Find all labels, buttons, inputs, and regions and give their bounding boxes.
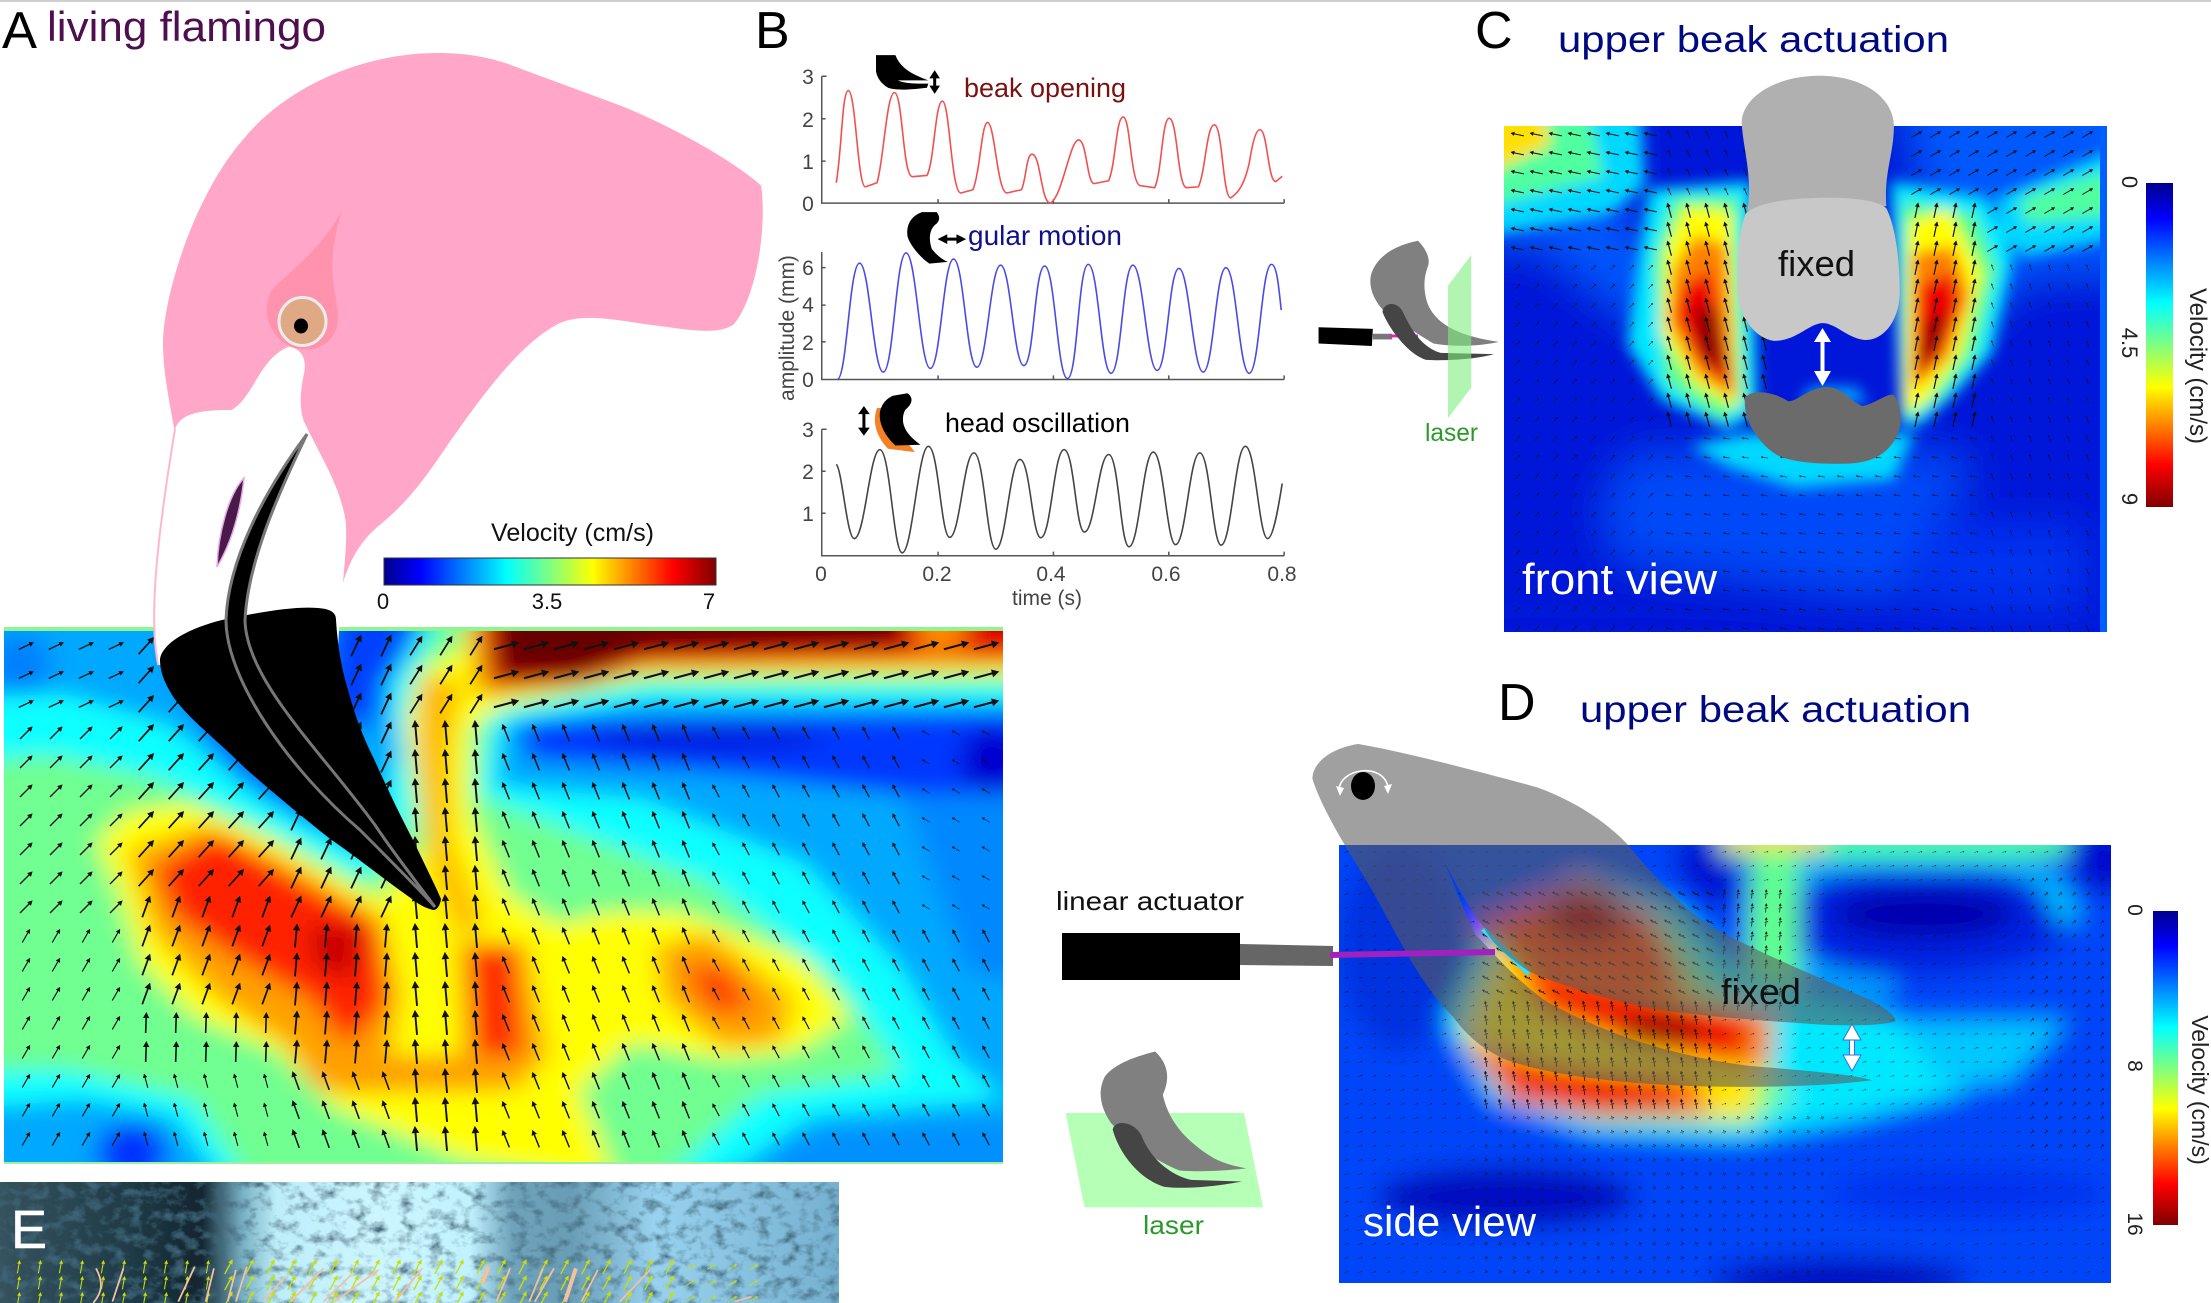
heading D: upper beak actuation [1580,689,1971,730]
nostril [217,478,244,567]
heading D [1498,674,1971,732]
linear actuator [1056,886,1495,980]
tick labels: 0.4 [1036,563,1066,586]
title: A [2,2,37,60]
panel B: kinematics time series: B [755,2,790,60]
tick labels: 0.8 [1267,563,1297,586]
photo texture [0,1182,839,1303]
panel C: front view [1478,12,2208,632]
bird beak overlay, transparent [1312,744,1895,1087]
tick labels: 4 [802,294,814,317]
colorbar D [2123,904,2211,1236]
quiver arrows D [1339,845,2111,1283]
heatmap C [1504,126,2107,632]
colorbar C: 9 [2117,493,2142,505]
tick labels: 2 [802,109,814,132]
icon: beak opening [876,55,940,94]
heading C [1475,2,1949,60]
icon: head oscillation [858,393,921,452]
eye patch [267,210,342,349]
head silhouette [1370,241,1499,346]
title [2,2,326,60]
colorbar D: 0 [2123,904,2146,916]
tick labels: 0.6 [1151,563,1181,586]
laser sheet [1448,255,1471,418]
peach trajectories [93,1267,751,1303]
colorbar C: 4.5 [2117,328,2142,358]
beak cross-section: upper jaw [1738,76,1901,464]
tick labels: 6 [802,257,814,280]
panel E: photo with flow arrows [0,1182,839,1303]
quiver arrows C [1508,125,2097,638]
colorbar C [2117,176,2211,507]
panel B: kinematics time series [755,2,1297,610]
label: gular motion: gular motion [968,220,1122,251]
panel A: velocity field under living flamingo [2,10,1003,1164]
label: side view: side view [1363,1198,1537,1245]
quiver arrows A [11,632,1001,1154]
beak opening trace [836,91,1282,203]
actuator schematic for panel C [1319,241,1499,418]
black lower beak [160,608,441,910]
tick labels: 0 [815,563,827,586]
white beak [154,347,346,673]
axis titles: amplitude (mm) [776,255,799,401]
gular motion trace [837,253,1281,379]
label: beak opening: beak opening [964,73,1126,103]
head oscillation trace [836,446,1282,553]
actuator body [1319,327,1373,346]
colorbar A: 0 [377,589,389,614]
slender upper beak [226,434,435,907]
panel D: side view [1056,674,2211,1300]
colorbar D: 16 [2123,1212,2146,1236]
title: living flamingo [47,3,326,50]
tick labels: 3 [802,419,814,442]
axis titles [776,255,1082,610]
colorbar D: 8 [2123,1060,2146,1072]
colorbar A: 7 [703,589,715,614]
tick labels [802,66,1297,586]
heatmap D [1339,845,2111,1283]
colorbar C: Velocity (cm/s) [2184,288,2211,444]
label: head oscillation: head oscillation [945,408,1130,438]
tick labels: 0 [802,193,814,216]
axes [822,76,1284,556]
heading C: upper beak actuation [1558,19,1949,60]
tick labels: 0 [802,369,814,392]
tick labels: 2 [802,461,814,484]
colorbar A: 3.5 [532,589,562,614]
tick labels: 3 [802,66,814,89]
linear actuator: linear actuator [1056,886,1244,916]
label: laser: laser [1143,1210,1204,1240]
flamingo head [163,53,763,616]
colorbar C: 0 [2117,176,2142,188]
pivot with rotation arrows [1336,771,1392,800]
arrow: gape motion [1843,1024,1861,1071]
label: laser: laser [1425,419,1478,447]
arrow: beak motion [1814,328,1831,386]
tick labels: 0.2 [922,563,952,586]
label: E: E [11,1200,47,1260]
label: front view: front view [1522,555,1717,604]
tick labels: 1 [802,503,814,526]
yellow flow arrows [8,1259,764,1303]
tick labels: 2 [802,332,814,355]
heatmap A [4,631,1003,1162]
axis titles: time (s) [1012,587,1082,610]
heading D: D [1498,674,1536,732]
label: fixed: fixed [1721,971,1801,1012]
tick labels: 1 [802,151,814,174]
colorbar A: Velocity (cm/s) [491,519,654,547]
eye [279,298,326,346]
label: fixed: fixed [1778,243,1855,284]
colorbar A [377,519,716,614]
heading C: C [1475,2,1513,60]
laser plane schematic [1066,1052,1263,1207]
icon: gular motion [907,212,966,264]
